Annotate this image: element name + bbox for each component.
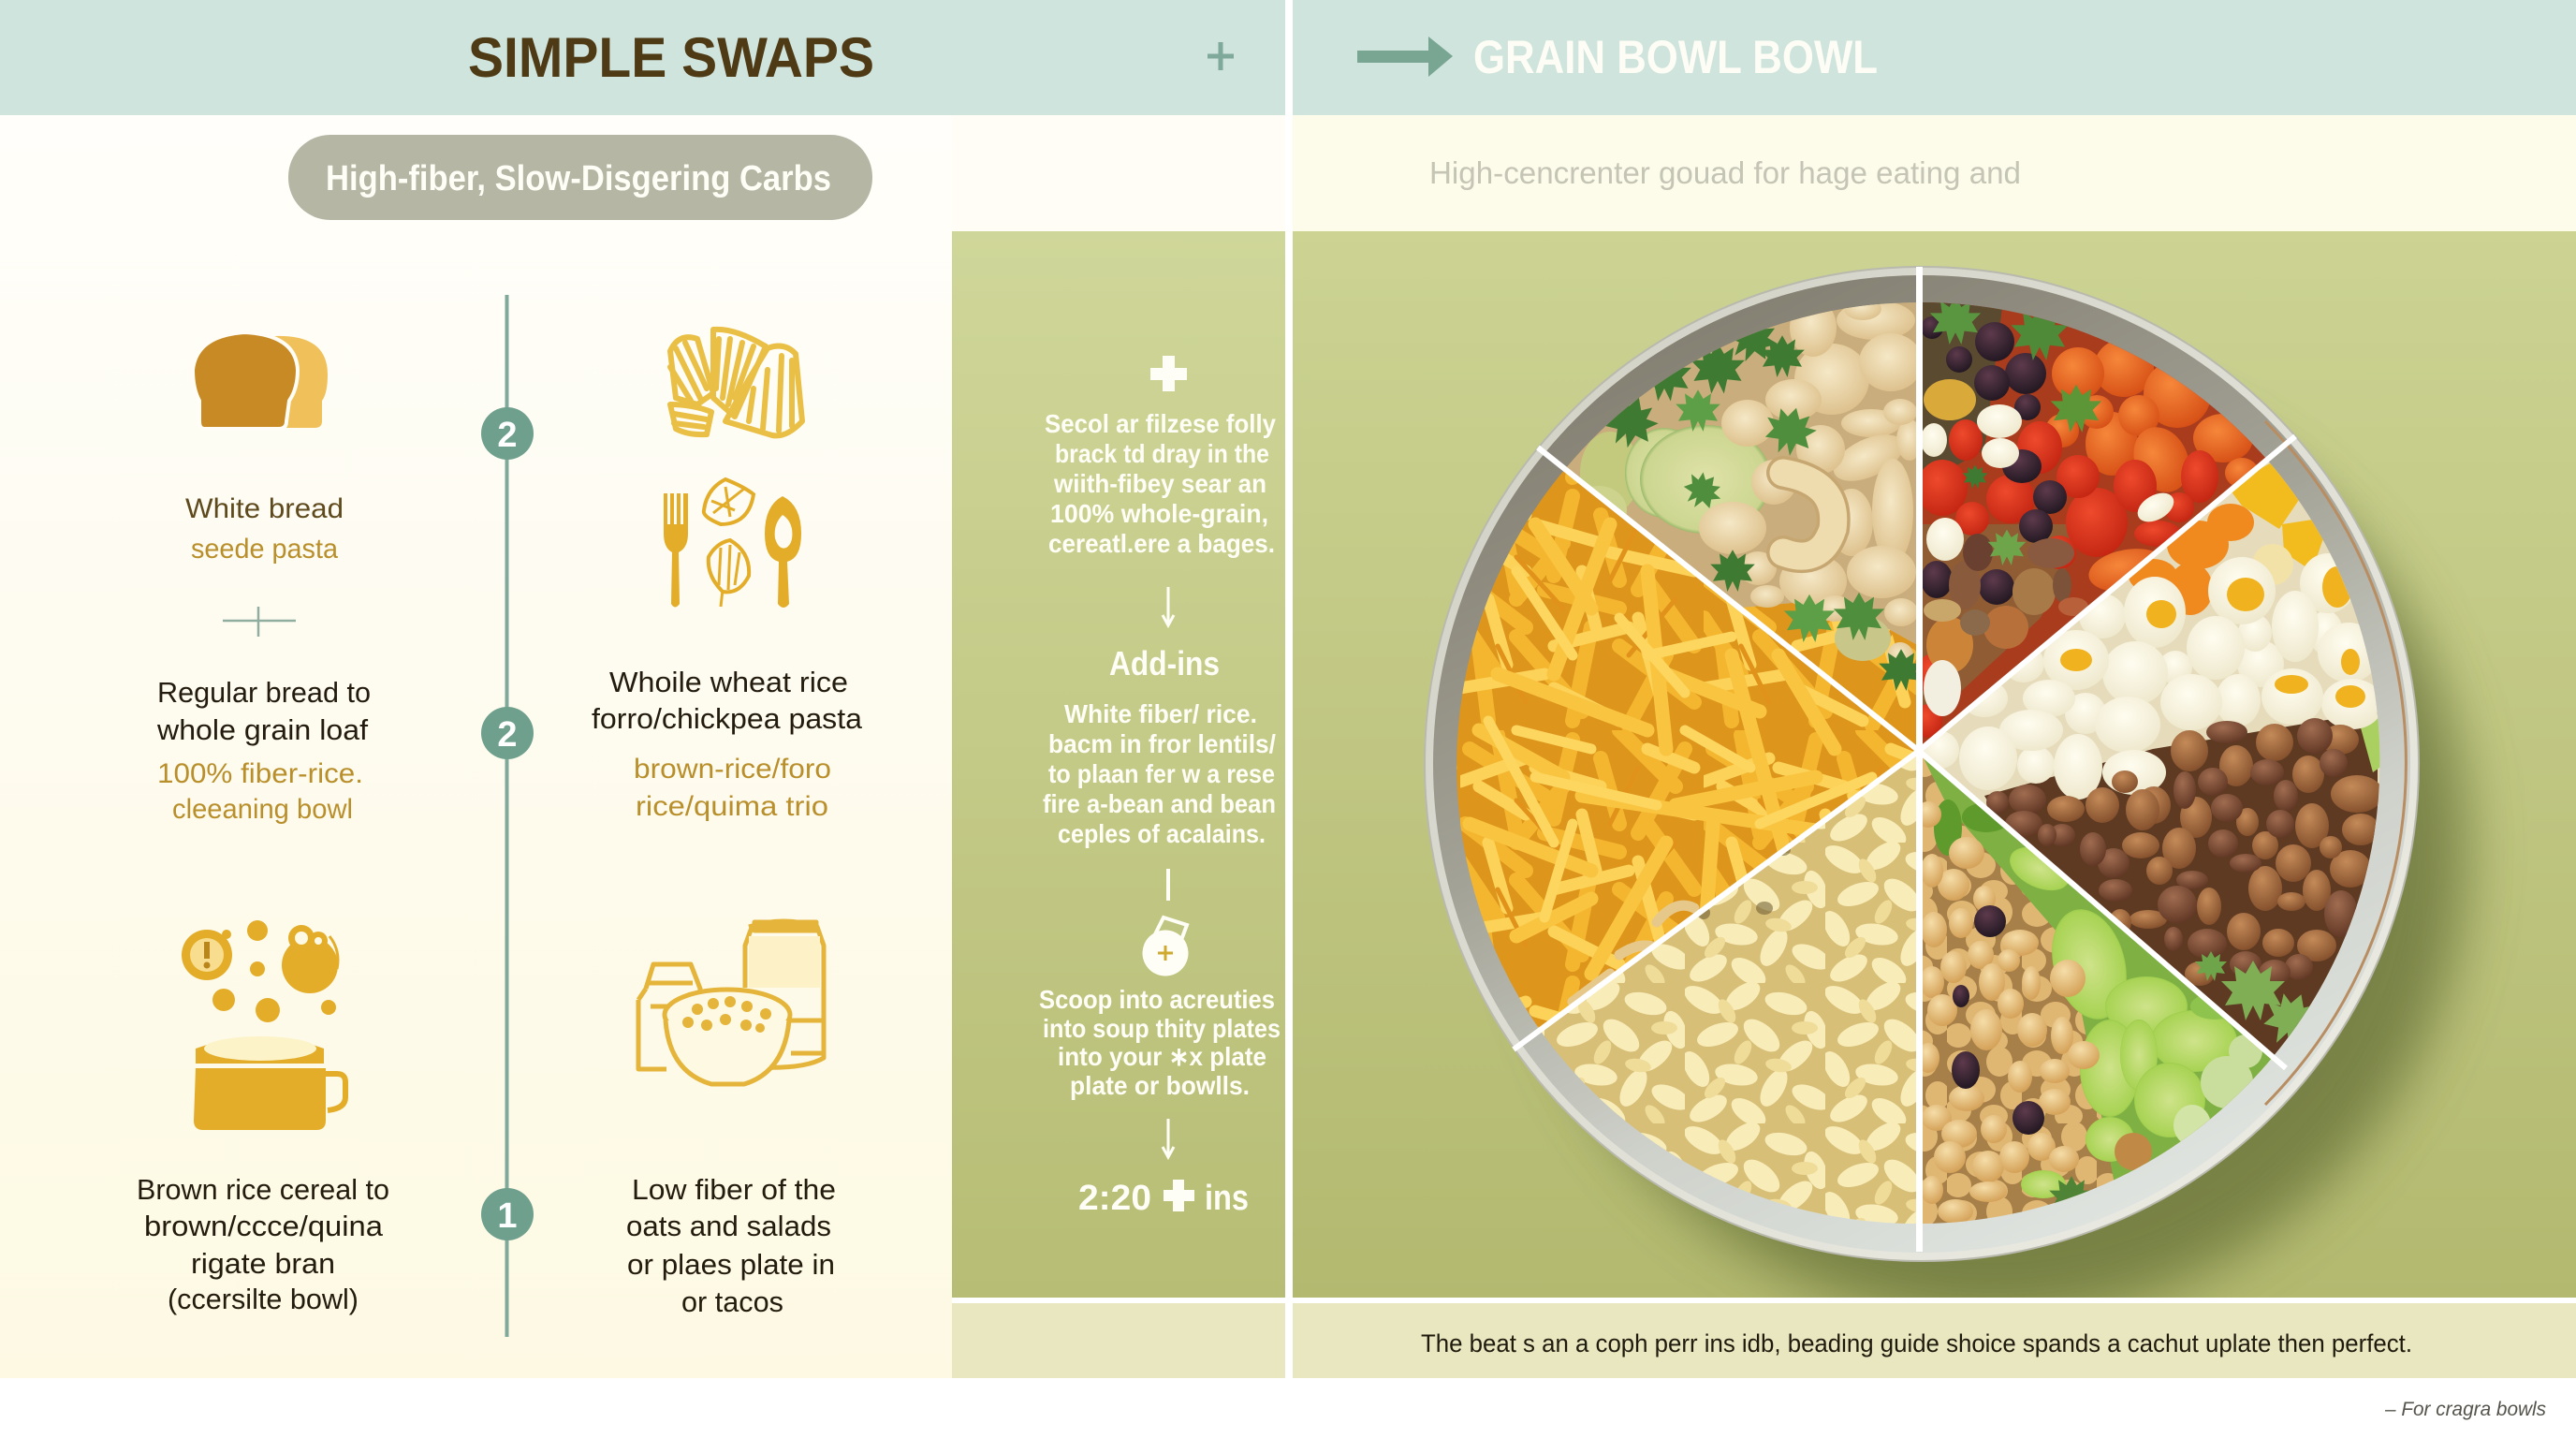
panel: bowl background	[1293, 231, 2576, 1298]
icon: arrow	[1357, 37, 1453, 77]
arrow	[1163, 1119, 1174, 1157]
step two text	[1043, 699, 1276, 848]
segment: white beans, eggs and brown beans	[1923, 462, 2379, 1055]
text: low fiber swap: Low fiber of the	[632, 1173, 836, 1206]
grain bowl	[1425, 267, 2419, 1261]
step three text: Scoop into acreuties	[1039, 985, 1275, 1014]
arrow	[1163, 587, 1174, 625]
text: brown rice cereal swap: rigate bran	[191, 1247, 335, 1280]
step three text: into your ∗x plate	[1058, 1042, 1266, 1071]
step one text: Secol ar filzese folly	[1045, 409, 1276, 438]
step one text: wiith-fibey sear an	[1053, 469, 1266, 498]
icon: cereal dots and mug	[182, 920, 345, 1130]
text: whole wheat swap: Whoile wheat rice	[609, 666, 848, 698]
segment: tomatoes, olives and beans	[1923, 302, 2265, 744]
time label: 2:20	[1078, 1179, 1151, 1218]
step two text: bacm in fror lentils/	[1048, 729, 1276, 758]
title: SIMPLE SWAPS	[468, 26, 874, 89]
text: regular bread swap: 100% fiber-rice.	[157, 758, 363, 789]
text: brown rice cereal swap: Brown rice cereal to	[137, 1173, 389, 1206]
pill heading: High-fiber, Slow-Disgering Carbs	[326, 159, 831, 198]
step two text: White fiber/ rice.	[1064, 699, 1257, 728]
text: low fiber swap: oats and salads	[626, 1210, 831, 1242]
text: low fiber swap: or plaes plate in	[627, 1248, 835, 1281]
text: white bread: seede pasta	[191, 534, 338, 565]
icon: plus	[1150, 356, 1187, 391]
step one text	[1045, 409, 1276, 558]
badge 2 lower	[481, 707, 534, 759]
left cream panel	[0, 115, 952, 1378]
text: regular bread swap: whole grain loaf	[156, 713, 368, 746]
text: regular bread swap: Regular bread to	[157, 676, 371, 709]
text: brown rice cereal swap: brown/ccce/quina	[144, 1210, 384, 1242]
icon: plus	[1208, 42, 1234, 70]
step two text: fire a-bean and bean	[1043, 789, 1276, 818]
footnote: – For cragra bowls	[2384, 1399, 2546, 1420]
text: whole wheat swap: rice/quima trio	[636, 791, 828, 822]
badge 2: 2	[497, 416, 518, 455]
text: whole wheat swap	[592, 666, 863, 822]
icon: pasta pieces	[670, 330, 802, 435]
right heading: GRAIN BOWL BOWL	[1473, 31, 1878, 83]
segment: chickpeas and cucumber	[1923, 758, 2271, 1224]
pill heading	[288, 135, 872, 220]
text: regular bread swap: cleeaning bowl	[172, 794, 353, 825]
segment: orzo	[1535, 749, 1928, 1236]
add-ins heading: Add-ins	[1109, 644, 1220, 682]
bowl shadow	[1563, 459, 2498, 1298]
text: low fiber swap	[626, 1173, 836, 1318]
icon: kettle with plus	[1142, 917, 1189, 976]
connector line	[1166, 869, 1170, 901]
text: whole wheat swap: forro/chickpea pasta	[592, 702, 863, 735]
icon: bread	[193, 332, 328, 429]
segment: shredded yellow	[1456, 472, 1914, 1028]
step two text: ceples of acalains.	[1058, 819, 1266, 848]
badge 2 lower: 2	[497, 715, 518, 755]
text: whole wheat swap: brown-rice/foro	[634, 754, 831, 785]
badge 1	[481, 1188, 534, 1240]
time label: ins	[1205, 1179, 1249, 1218]
subtitle row backgrounds	[952, 115, 2576, 231]
step one text: brack td dray in the	[1055, 439, 1269, 468]
caption strip: The beat s an a coph perr ins idb, beading guide shoice spands a cachut uplate then perfect.	[1421, 1329, 2412, 1357]
segment: pasta shells with herbs and cucumber	[1567, 302, 1916, 745]
text: brown rice cereal swap: (ccersilte bowl)	[168, 1283, 359, 1315]
badge 1: 1	[497, 1196, 518, 1236]
text: brown rice cereal swap	[137, 1173, 389, 1315]
text: regular bread swap	[156, 676, 371, 825]
step one text: cereatl.ere a bages.	[1048, 529, 1275, 558]
step one text: 100% whole-grain,	[1050, 499, 1268, 528]
panel: build steps	[952, 231, 1285, 1298]
time label	[1078, 1179, 1249, 1218]
panel: empty strip left	[952, 1303, 1285, 1378]
text: white bread: White bread	[185, 493, 344, 524]
step three text: plate or bowlls.	[1070, 1071, 1250, 1100]
step three text: into soup thity plates	[1043, 1014, 1281, 1043]
badge 2	[481, 407, 534, 460]
bowl dividers	[1514, 267, 2295, 1252]
header right: grain bowl	[1293, 0, 2576, 115]
step two text: to plaan fer w a rese	[1048, 759, 1275, 788]
icon: fork, leaves and spoon	[664, 479, 801, 608]
icon: cereal bowl, box and jar	[638, 921, 824, 1084]
caption strip	[1293, 1303, 2576, 1378]
icon: thin plus separator	[223, 607, 296, 637]
timeline with numbered badges	[481, 295, 534, 1337]
bowl rim and wall	[1425, 267, 2419, 1261]
text: white bread	[185, 493, 344, 565]
step three text	[1039, 985, 1281, 1100]
text: low fiber swap: or tacos	[681, 1285, 783, 1318]
subtitle: High-cencrenter gouad for hage eating and	[1429, 155, 2021, 190]
header left: simple swaps	[0, 0, 1285, 115]
